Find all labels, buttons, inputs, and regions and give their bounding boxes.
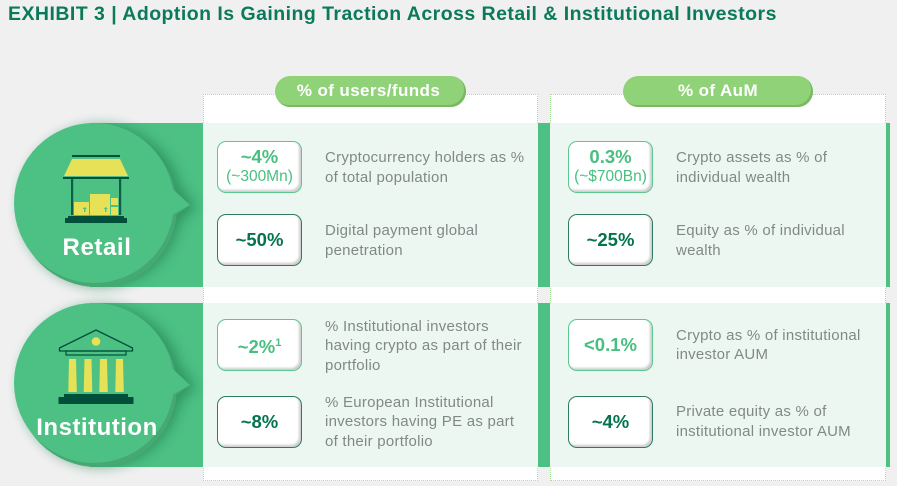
text: digital payment: [325, 222, 478, 258]
text: crypto institutional AUM: [676, 326, 861, 363]
stat: <0.1%: [568, 319, 653, 371]
panel: retail users content: [203, 123, 538, 287]
text: institutional investors crypto: portfolio: [325, 356, 381, 374]
heading pill: users and funds: % of users/funds: [297, 81, 440, 100]
text: equity: wealth: [676, 242, 721, 258]
panel: retail AuM content: [550, 123, 886, 287]
text: crypto assets: [676, 149, 827, 186]
stat: ~4% holders: [217, 141, 302, 193]
panel: AuM column: [550, 94, 886, 481]
text: private equity AUM: Private equity as % of: [676, 403, 827, 420]
text: European institutional investors: [325, 394, 514, 450]
text: cryptocurrency holders: of total population: [325, 168, 448, 186]
label: Institution: Institution: [36, 414, 158, 441]
stat: 0.3%: [568, 141, 653, 193]
heading pill: AuM: % of AuM: [678, 81, 758, 100]
stat: ~25%: [568, 214, 653, 266]
stat: ~4% private equity: ~4%: [592, 411, 629, 432]
text: crypto institutional AUM: Crypto as % of institutional: [676, 326, 861, 344]
text: institutional investors crypto: [325, 318, 522, 374]
title: EXHIBIT 3 | Adoption Is Gaining Traction Across Retail & Institutional Investors: [8, 3, 777, 25]
stat: ~2%: [217, 319, 302, 371]
text: cryptocurrency holders: [325, 149, 524, 186]
text: equity: [676, 222, 845, 258]
band: institution: [90, 303, 890, 467]
panel: users and funds column: [203, 94, 538, 481]
text: digital payment: Digital payment global: [325, 222, 478, 239]
band: retail: [90, 123, 890, 287]
stat: ~8%: [217, 396, 302, 448]
text: cryptocurrency holders: Cryptocurrency holders as %: [325, 149, 524, 166]
retail badge with icon: [10, 116, 198, 296]
text: institutional investors crypto: % Institutional investors: [325, 318, 489, 334]
stat: 0.3%: (~$700Bn): [574, 168, 647, 185]
text: European institutional investors: % European Institutional: [325, 394, 494, 410]
text: private equity AUM: institutional investor AUM: [676, 422, 851, 440]
text: crypto assets: individual wealth: [676, 168, 790, 186]
text: private equity AUM: [676, 403, 851, 440]
stat: ~4% holders: ~4%: [241, 146, 278, 167]
stat: ~50%: ~50%: [236, 229, 283, 250]
stat: ~8%: ~8%: [241, 411, 278, 432]
stat: ~4% private equity: [568, 396, 653, 448]
stat: <0.1%: <0.1%: [584, 334, 637, 355]
text: institutional investors crypto: having crypto as part of their: [325, 337, 522, 354]
panel: institution users content: [203, 303, 538, 467]
institution badge with icon: [10, 296, 198, 476]
heading pill: users and funds: [275, 76, 466, 107]
label: Retail: Retail: [63, 234, 131, 261]
icon: storefront: [63, 155, 129, 223]
text: crypto assets: Crypto assets as % of: [676, 149, 827, 166]
text: crypto institutional AUM: investor AUM: [676, 346, 768, 363]
heading pill: AuM: [623, 76, 813, 107]
panel: institution AuM content: [550, 303, 886, 467]
stat: ~4% holders: (~300Mn): [226, 168, 293, 185]
text: equity: Equity as % of individual: [676, 222, 845, 239]
stat: ~2%: ~2%1: [238, 336, 281, 357]
stat: ~50%: [217, 214, 302, 266]
text: digital payment: penetration: [325, 242, 403, 258]
text: European institutional investors: investors having PE as part: [325, 413, 514, 430]
stat: 0.3%: 0.3%: [589, 146, 632, 167]
stat: ~25%: ~25%: [587, 229, 634, 250]
icon: bank building: [58, 330, 134, 404]
text: European institutional investors: of their portfolio: [325, 432, 433, 450]
